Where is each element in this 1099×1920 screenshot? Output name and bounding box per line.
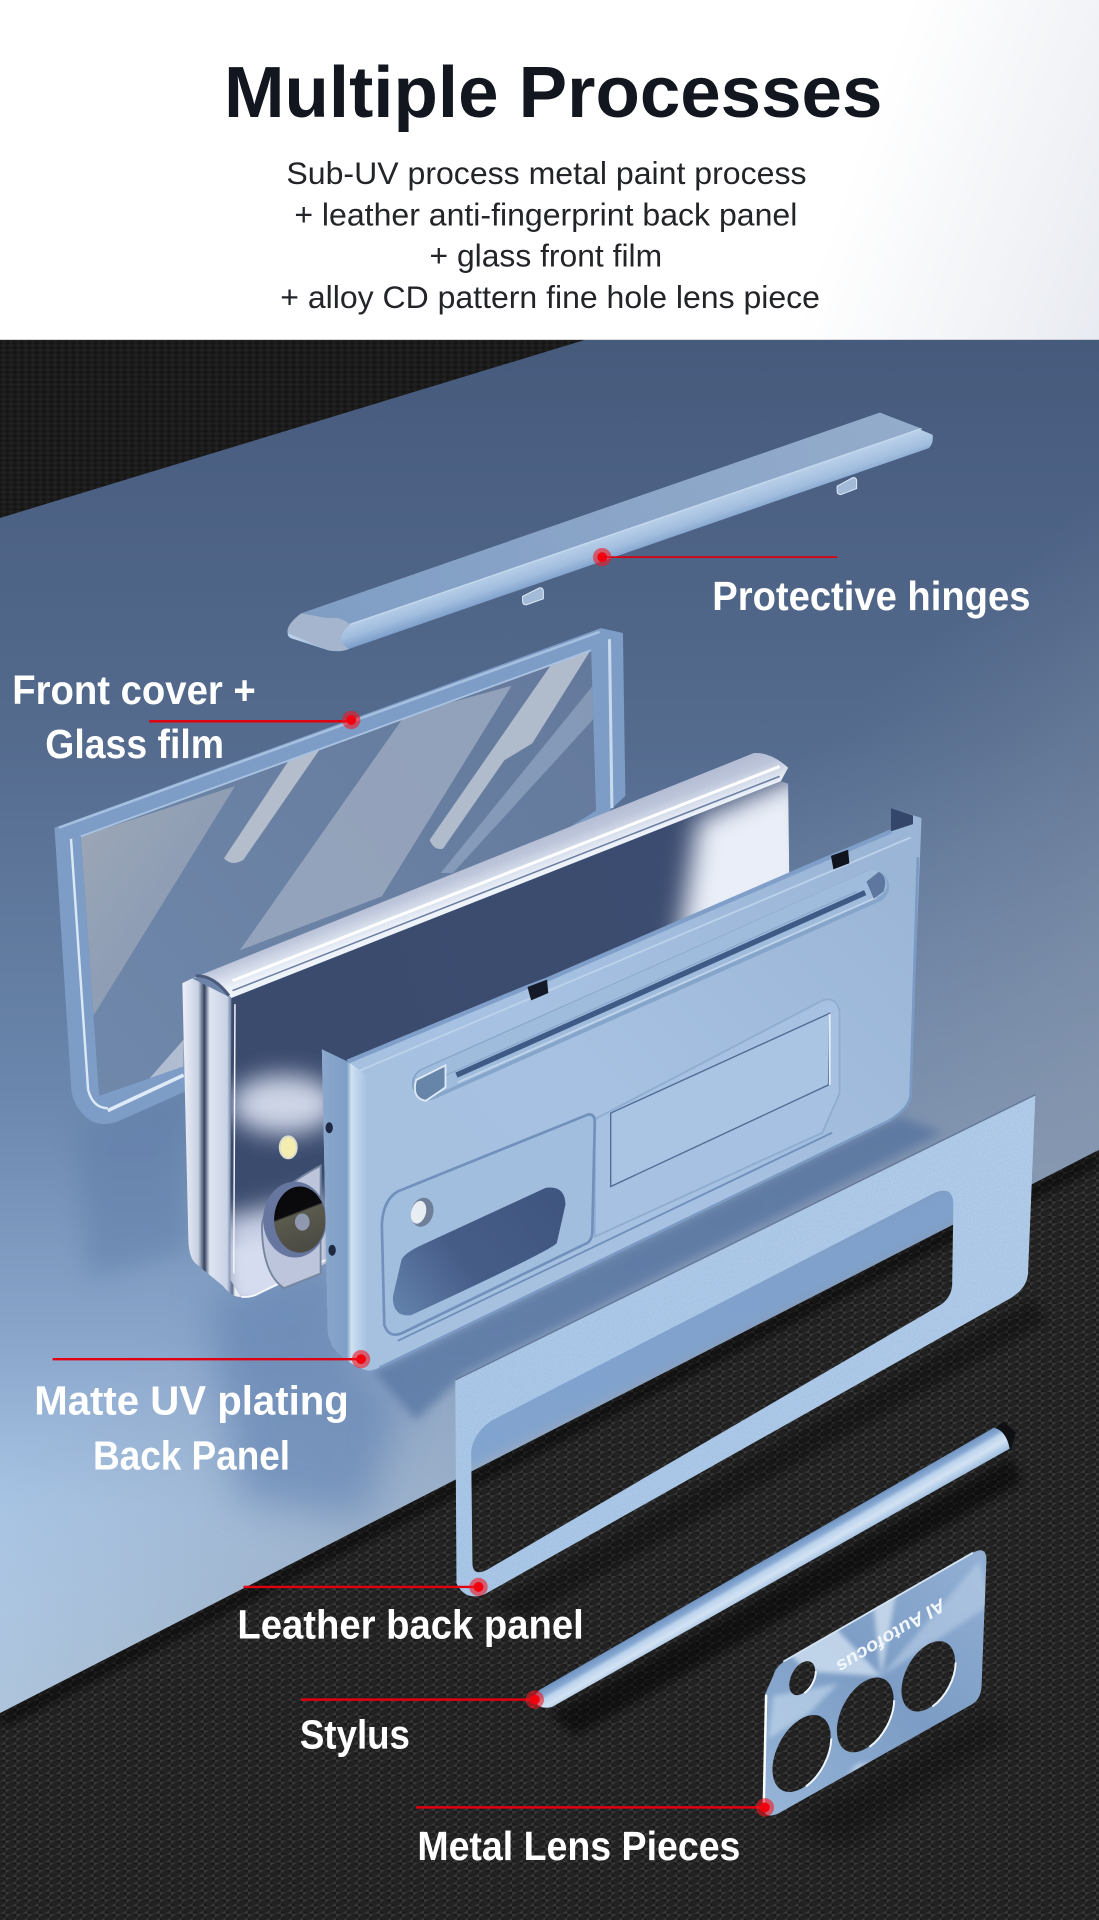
top strip (192, 753, 788, 998)
metal lens piece (760, 1550, 991, 1816)
subtitle: + alloy CD pattern fine hole lens piece (280, 280, 820, 315)
callout: matte UV plating back panel: Back Panel (93, 1432, 290, 1478)
callout: front cover and glass film (12, 667, 360, 767)
floor seen through leather window (465, 1182, 979, 1469)
lower light area (230, 1180, 326, 1297)
reflection of phone and case (208, 1261, 404, 1518)
callout: matte UV plating back panel: Matte UV plating (34, 1377, 349, 1423)
camera lens (262, 1166, 327, 1288)
hinge clips (523, 588, 543, 605)
subtitle: + glass front film (430, 239, 662, 274)
phone back glass (230, 781, 789, 1297)
callout: stylus (300, 1690, 544, 1758)
callout: matte UV plating back panel (34, 1350, 370, 1478)
matte UV plating back panel (322, 808, 922, 1371)
case left side (322, 1049, 367, 1370)
header background (0, 0, 1099, 340)
glass pane (81, 650, 596, 1096)
camera cutout plate (382, 1114, 595, 1335)
callout: leather back panel (237, 1578, 584, 1647)
bright band by flash (230, 1075, 338, 1134)
callout: metal lens pieces: Metal Lens Pieces (417, 1823, 740, 1869)
subtitle: Sub-UV process metal paint process (286, 156, 807, 191)
stylus slot (415, 872, 885, 1101)
hinge spine side (182, 978, 241, 1297)
callout: front cover and glass film: Front cover + (12, 667, 256, 713)
frame (54, 628, 625, 1124)
highlight near top right (662, 782, 790, 927)
subtitle (280, 156, 820, 315)
protective hinge bar (288, 413, 933, 651)
reflection of front cover (84, 1120, 188, 1274)
background: blue floor (0, 340, 1099, 1713)
case face (322, 808, 922, 1371)
leather back panel (441, 1084, 1046, 1610)
flash (280, 1136, 297, 1158)
side holes (326, 1122, 333, 1133)
hinge left end cap (288, 613, 350, 651)
engraved text: AI Autofocus (833, 1594, 951, 1678)
callout: metal lens pieces (416, 1798, 774, 1869)
callout: front cover and glass film: Glass film (45, 721, 224, 767)
subtitle: + leather anti-fingerprint back panel (294, 197, 797, 232)
callout: stylus: Stylus (300, 1712, 410, 1758)
title: Multiple Processes (224, 53, 882, 133)
kickstand (595, 999, 840, 1237)
callout: protective hinges (593, 548, 1030, 619)
shadows on dark surface (490, 1298, 1046, 1849)
front cover with glass film (54, 628, 625, 1124)
glass reflections (81, 786, 235, 1016)
callout: protective hinges: Protective hinges (712, 573, 1030, 619)
stylus (535, 1422, 1016, 1708)
folded phone (182, 753, 814, 1310)
shade between case and leather (373, 1117, 942, 1420)
hole rims (760, 1631, 967, 1803)
callout: leather back panel: Leather back panel (237, 1601, 584, 1647)
notches (527, 980, 548, 1000)
